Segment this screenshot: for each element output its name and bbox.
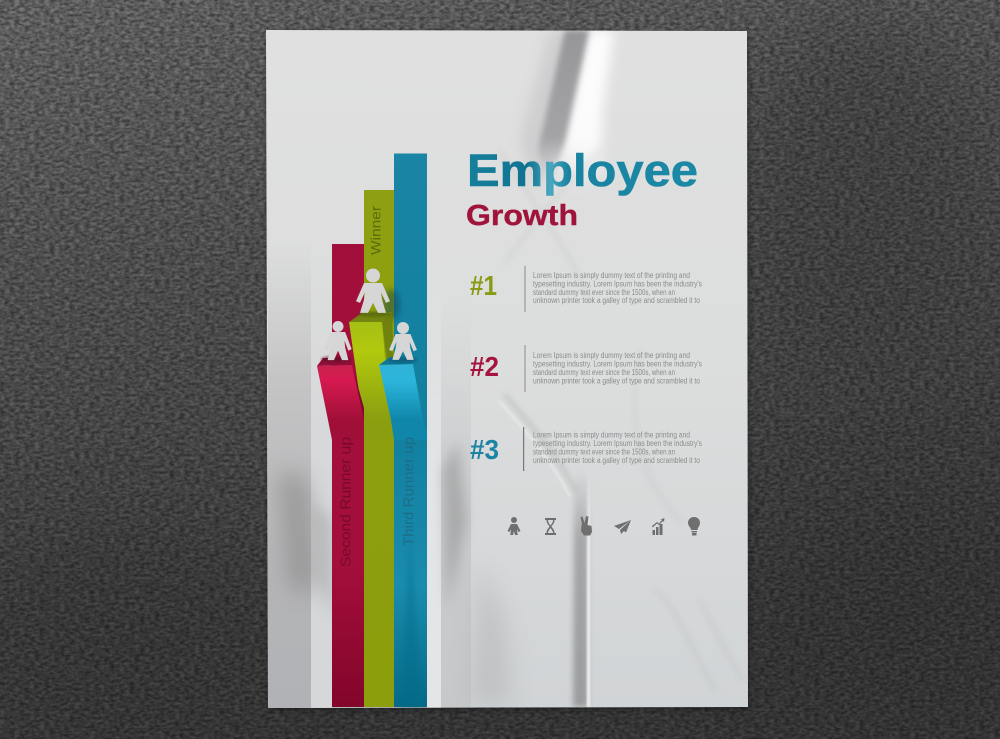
icon: third place figure (388, 322, 418, 363)
divider 2 (524, 345, 526, 392)
icon row (508, 516, 700, 536)
paragraph 3 (533, 430, 702, 465)
paragraph 1 (533, 271, 702, 305)
paragraph 2: typesetting industry. Lorem Ipsum has been the industry's (533, 360, 702, 368)
paragraph 1: typesetting industry. Lorem Ipsum has been the industry's (533, 280, 702, 288)
poster sheet (266, 30, 749, 710)
label: Winner: Winner (368, 206, 384, 255)
icon: hourglass (545, 518, 556, 535)
subtitle: Growth: Growth (466, 200, 578, 232)
label: Third Runner up: Third Runner up (402, 437, 418, 546)
entry #1 (470, 266, 702, 312)
icon: person (508, 517, 520, 535)
paragraph 2: standard dummy text ever since the 1500s, when an (533, 368, 675, 377)
rank number 3: #3 (470, 434, 499, 465)
bar crease shading (401, 530, 421, 707)
title: Employee: Employee (467, 145, 698, 196)
icon: growth chart (652, 518, 664, 535)
paragraph 1: unknown printer took a galley of type and scrambled it to (533, 296, 700, 305)
paragraph 2: unknown printer took a galley of type and scrambled it to (533, 376, 700, 386)
entry #2 (470, 345, 702, 392)
bar: third runner up (394, 154, 427, 707)
fold: third runner up ribbon (379, 357, 427, 440)
top fold highlight and shadow (560, 30, 617, 176)
paragraph 1: standard dummy text ever since the 1500s, when an (533, 288, 675, 297)
divider 1 (524, 266, 526, 312)
paragraph 3: standard dummy text ever since the 1500s, when an (533, 448, 675, 456)
divider 3 (523, 427, 524, 471)
label: Second Runner up: Second Runner up (338, 437, 354, 567)
fold: winner ribbon (349, 312, 394, 440)
icon: winner figure (356, 268, 391, 317)
figure shadow on bars (382, 289, 400, 321)
vertical fold crease (573, 470, 588, 707)
icon: paper plane (614, 520, 631, 534)
wrinkles (366, 211, 700, 525)
rank number 1: #1 (470, 270, 497, 301)
icon: victory hand (580, 516, 592, 536)
paragraph 3: typesetting industry. Lorem Ipsum has been the industry's (533, 439, 702, 448)
rank number 2: #2 (470, 351, 499, 382)
icon: light bulb (688, 517, 700, 536)
left shaded column (268, 288, 311, 708)
paragraph 2 (533, 351, 702, 386)
bar: second runner up (332, 244, 364, 707)
fold: second runner up ribbon (317, 358, 364, 440)
icon: second place figure (321, 321, 352, 362)
paragraph 1: Lorem Ipsum is simply dummy text of the printing and (533, 271, 690, 280)
ribbon chart (317, 154, 427, 707)
bar: winner (364, 190, 394, 707)
title (466, 145, 698, 232)
paragraph 2: Lorem Ipsum is simply dummy text of the printing and (533, 351, 690, 360)
paragraph 3: unknown printer took a galley of type and scrambled it to (533, 456, 700, 465)
entry #3 (470, 427, 702, 471)
paragraph 3: Lorem Ipsum is simply dummy text of the printing and (533, 430, 690, 440)
